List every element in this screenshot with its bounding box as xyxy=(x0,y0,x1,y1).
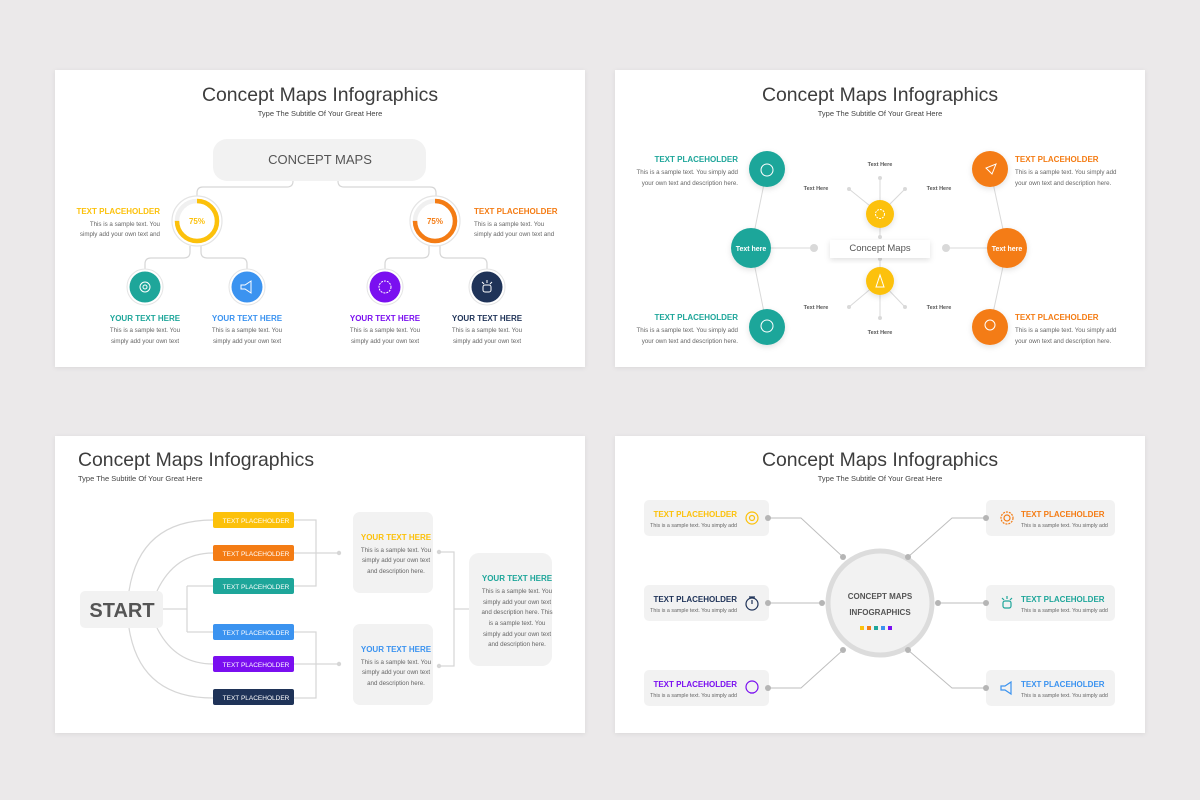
ring: left 75%: 75% xyxy=(189,217,205,226)
gray boxes xyxy=(353,512,553,705)
pills: TEXT PLACEHOLDER xyxy=(223,584,290,591)
small labels: Text Here xyxy=(927,186,951,192)
connectors xyxy=(768,518,986,688)
text blocks: bottom labels: simply add your own text xyxy=(453,338,521,345)
text blocks: bottom labels: YOUR TEXT HERE xyxy=(350,314,421,323)
text blocks xyxy=(650,510,1108,699)
text block: left placeholder: This is a sample text. You xyxy=(90,221,161,228)
text blocks: bottom labels: This is a sample text. You xyxy=(212,327,283,334)
text block: right placeholder xyxy=(474,207,558,238)
gray boxes: simply add your own text xyxy=(483,631,551,638)
gray boxes: and description here. xyxy=(488,641,546,648)
subtitle: Type The Subtitle Of Your Great Here xyxy=(818,109,942,118)
text blocks: This is a sample text. You simply add xyxy=(637,169,739,176)
text blocks: TEXT PLACEHOLDER xyxy=(654,313,738,322)
text block: left placeholder: simply add your own text and xyxy=(80,231,161,238)
panel: slide 4 hub xyxy=(615,436,1145,733)
gray boxes: This is a sample text. You xyxy=(361,547,432,554)
gray boxes: This is a sample text. You xyxy=(361,659,432,666)
small labels: Text Here xyxy=(868,330,892,336)
hub circle xyxy=(828,551,932,655)
gray boxes: YOUR TEXT HERE xyxy=(482,574,553,583)
hub circle: CONCEPT MAPS xyxy=(848,592,913,601)
ring: right 75% xyxy=(410,196,460,246)
text blocks: your own text and description here. xyxy=(642,338,738,345)
root box xyxy=(213,139,426,181)
text blocks: This is a sample text. You simply add xyxy=(637,327,739,334)
text block: right placeholder: simply add your own text and xyxy=(474,231,555,238)
text blocks: bottom labels: simply add your own text xyxy=(213,338,281,345)
text blocks: This is a sample text. You simply add xyxy=(1021,608,1108,614)
title: Concept Maps Infographics xyxy=(762,84,998,106)
start box: START xyxy=(89,600,155,622)
gray boxes: This is a sample text. You xyxy=(482,588,553,595)
panel: slide 2 network: Text here xyxy=(736,246,766,253)
text blocks: TEXT PLACEHOLDER xyxy=(653,595,737,604)
gray boxes: simply add your own text xyxy=(362,669,430,676)
title: Concept Maps Infographics xyxy=(202,84,438,106)
gray boxes: and description here. This xyxy=(481,609,553,616)
ring: left 75% xyxy=(172,196,222,246)
pills: TEXT PLACEHOLDER xyxy=(223,630,290,637)
text blocks: your own text and description here. xyxy=(642,180,738,187)
panel: slide 3 start flow xyxy=(55,436,585,733)
small labels: Text Here xyxy=(927,305,951,311)
text blocks: This is a sample text. You simply add xyxy=(1015,169,1117,176)
ring: right 75%: 75% xyxy=(427,217,443,226)
pills: TEXT PLACEHOLDER xyxy=(223,518,290,525)
text block: left placeholder xyxy=(76,207,161,238)
panel: slide 2 network xyxy=(615,70,1145,367)
root box: CONCEPT MAPS xyxy=(268,152,372,167)
small labels: Text Here xyxy=(804,305,828,311)
gray boxes: and description here. xyxy=(367,568,425,575)
text blocks: bottom labels: This is a sample text. You xyxy=(110,327,181,334)
text block: left placeholder: TEXT PLACEHOLDER xyxy=(76,207,160,216)
text blocks: This is a sample text. You simply add xyxy=(650,523,737,529)
connectors xyxy=(129,520,469,698)
connector lines xyxy=(751,169,1007,327)
title: Concept Maps Infographics xyxy=(78,449,314,471)
text blocks: This is a sample text. You simply add xyxy=(1021,523,1108,529)
title: Concept Maps Infographics xyxy=(762,449,998,471)
text blocks: TEXT PLACEHOLDER xyxy=(1021,595,1105,604)
gray boxes: simply add your own text xyxy=(362,557,430,564)
text block: right placeholder: This is a sample text. You xyxy=(474,221,545,228)
text blocks: bottom labels: This is a sample text. You xyxy=(452,327,523,334)
text blocks: This is a sample text. You simply add xyxy=(650,608,737,614)
text blocks: This is a sample text. You simply add xyxy=(1015,327,1117,334)
text blocks: bottom labels xyxy=(110,314,523,345)
gray boxes: YOUR TEXT HERE xyxy=(361,645,432,654)
panel: slide 1 tree xyxy=(55,70,585,367)
pills: TEXT PLACEHOLDER xyxy=(223,662,290,669)
text blocks: This is a sample text. You simply add xyxy=(650,693,737,699)
text blocks: bottom labels: YOUR TEXT HERE xyxy=(110,314,181,323)
text blocks: bottom labels: This is a sample text. You xyxy=(350,327,421,334)
text blocks: bottom labels: YOUR TEXT HERE xyxy=(212,314,283,323)
small labels: Text Here xyxy=(868,162,892,168)
subtitle: Type The Subtitle Of Your Great Here xyxy=(258,109,382,118)
pills: TEXT PLACEHOLDER xyxy=(223,551,290,558)
gray boxes: YOUR TEXT HERE xyxy=(361,533,432,542)
small labels: Text Here xyxy=(804,186,828,192)
text blocks: TEXT PLACEHOLDER xyxy=(1015,313,1099,322)
text blocks: TEXT PLACEHOLDER xyxy=(1021,680,1105,689)
circles: nodes xyxy=(731,151,1027,345)
pills: TEXT PLACEHOLDER xyxy=(223,695,290,702)
center label xyxy=(830,240,930,258)
gray boxes: is a sample text. You xyxy=(489,620,546,627)
hub circle: INFOGRAPHICS xyxy=(849,608,911,617)
text block: right placeholder: TEXT PLACEHOLDER xyxy=(474,207,558,216)
text blocks: bottom labels: YOUR TEXT HERE xyxy=(452,314,523,323)
start box xyxy=(80,591,163,628)
text blocks: TEXT PLACEHOLDER xyxy=(654,155,738,164)
subtitle: Type The Subtitle Of Your Great Here xyxy=(818,474,942,483)
icon circles xyxy=(127,269,505,305)
subtitle: Type The Subtitle Of Your Great Here xyxy=(78,474,203,483)
center label: Concept Maps xyxy=(849,243,911,254)
text blocks: TEXT PLACEHOLDER xyxy=(653,510,737,519)
text blocks: TEXT PLACEHOLDER xyxy=(1015,155,1099,164)
text blocks: your own text and description here. xyxy=(1015,180,1112,187)
text blocks: bottom labels: simply add your own text xyxy=(111,338,179,345)
panel: slide 2 network: Text here xyxy=(992,246,1022,253)
pills xyxy=(213,512,294,705)
text blocks: This is a sample text. You simply add xyxy=(1021,693,1108,699)
text blocks: TEXT PLACEHOLDER xyxy=(653,680,737,689)
boxes xyxy=(644,500,1115,706)
text blocks: bottom labels: simply add your own text xyxy=(351,338,419,345)
text blocks xyxy=(637,155,1117,345)
icons xyxy=(746,512,1013,694)
small labels xyxy=(804,162,951,336)
text blocks: your own text and description here. xyxy=(1015,338,1112,345)
text blocks: TEXT PLACEHOLDER xyxy=(1021,510,1105,519)
gray boxes: and description here. xyxy=(367,680,425,687)
gray boxes: simply add your own text xyxy=(483,599,551,606)
